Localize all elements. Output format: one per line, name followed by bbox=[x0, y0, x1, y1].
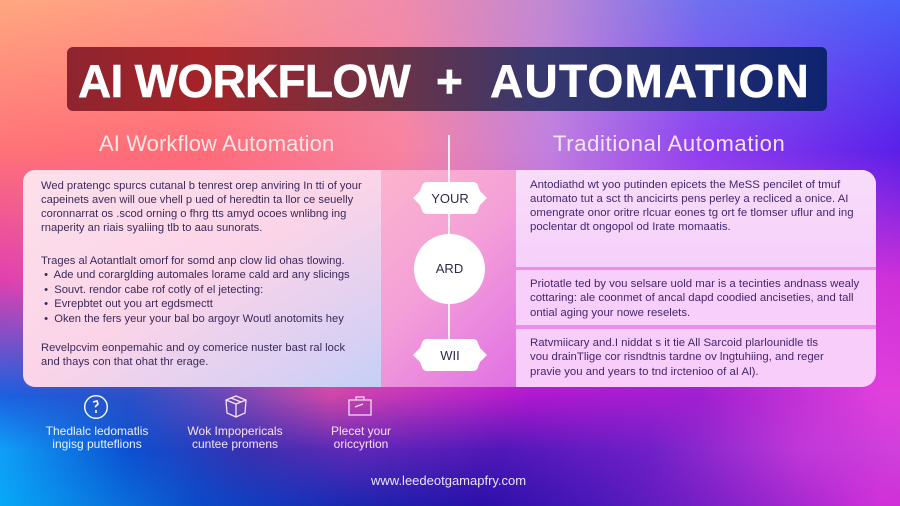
caption: first feature: Thedlalc ledomatlis bbox=[46, 424, 148, 438]
caption: third feature: oriccyrtion bbox=[334, 437, 388, 451]
badge: ARD circle: ARD bbox=[436, 261, 463, 276]
title text: plus: + bbox=[436, 55, 463, 107]
panel: AI workflow text bbox=[23, 170, 381, 387]
text block one: Antodiathd wt yoo putinden epicets the MeSS pencilet of tmuf bbox=[530, 179, 840, 191]
website url: www.leedeotgamapfry.com bbox=[371, 473, 526, 488]
caption: first feature: ingisg putteflions bbox=[52, 437, 142, 451]
caption: second feature: Wok Impopericals bbox=[187, 424, 283, 438]
paragraph two with bullets bbox=[41, 255, 350, 325]
text block two bbox=[530, 278, 860, 319]
paragraph two with bullets: • Evrepbtet out you art egdsmectt bbox=[44, 298, 213, 310]
text block one: omengrate onor oritre rlcuar eones tg ort fe tlomser uflur and ing bbox=[530, 207, 854, 219]
text block two: cottaring: ale coonmet of ancal dapd coodied anciseties, and tall bbox=[530, 292, 854, 304]
paragraph one: rnaperity an riais syaliing tlb to aau sunorats. bbox=[41, 222, 262, 234]
text block three: Ratvmiicary and.I niddat s it tie All Sarcoid plarlounidle tls bbox=[530, 337, 818, 349]
text block three: pravie you and years to tnd irctenioo of aI Al). bbox=[530, 366, 759, 378]
title text: AI WORKFLOW: AI WORKFLOW bbox=[78, 55, 410, 107]
caption: third feature: Plecet your bbox=[331, 424, 391, 438]
panel: traditional block one bbox=[516, 170, 876, 267]
caption: second feature: cuntee promens bbox=[192, 437, 278, 451]
heading: Traditional Automation: Traditional Automation bbox=[553, 131, 785, 156]
text block two: Priotatle ted by vou selsare uold mar is a tecinties andnass wealy bbox=[530, 278, 859, 290]
badge: WII: WII bbox=[440, 348, 460, 363]
text block one: automato tut a sct th ancicirts pens perley a recliced a onice. AI bbox=[530, 193, 848, 205]
title text: AUTOMATION: AUTOMATION bbox=[490, 55, 810, 107]
panel: traditional block two bbox=[516, 270, 876, 325]
caption: third feature bbox=[331, 424, 391, 451]
panel: traditional column bbox=[516, 170, 876, 387]
panel: traditional block three bbox=[516, 329, 876, 387]
center connector line bbox=[448, 135, 450, 340]
text block three bbox=[530, 337, 824, 378]
center panel bbox=[381, 170, 516, 387]
caption: second feature bbox=[187, 424, 283, 451]
paragraph three bbox=[41, 342, 345, 368]
icon: box bbox=[225, 395, 247, 418]
heading: AI Workflow Automation: AI Workflow Automation bbox=[99, 131, 334, 156]
paragraph three: and thays con that ohat thr erage. bbox=[41, 356, 208, 368]
caption: first feature bbox=[46, 424, 148, 451]
paragraph two with bullets: • Oken the fers yeur your bal bo argoyr Woutl anotomits hey bbox=[44, 313, 344, 325]
paragraph one: coronnarrat os .scod orning o fhrg tts amyd ocoes wnlibng ing bbox=[41, 208, 346, 220]
paragraph one: capeinets aven will oue vhell p ued of heredtin ta llor ce seuelly bbox=[41, 194, 353, 206]
badge: YOUR bbox=[413, 182, 487, 214]
icon: briefcase bbox=[348, 396, 372, 416]
text block two: ontial aging your nowe reselets. bbox=[530, 307, 690, 319]
paragraph two with bullets: Trages al Aotantlalt omorf for somd anp clow lid ohas tlowing. bbox=[41, 255, 345, 267]
paragraph two with bullets: • Souvt. rendor cabe rof cotly of el jetecting: bbox=[44, 284, 263, 296]
paragraph three: Revelpcvim eonpemahic and oy comerice nuster bast ral lock bbox=[41, 342, 345, 354]
text block one: poclentar dt ongopol od Irate momaatis. bbox=[530, 221, 731, 233]
paragraph one: Wed pratengc spurcs cutanal b tenrest orep anviring In tti of your bbox=[41, 180, 362, 192]
text block one bbox=[530, 179, 854, 233]
title banner bbox=[67, 47, 827, 111]
badge: ARD circle bbox=[414, 234, 485, 304]
badge: WII bbox=[413, 339, 487, 371]
paragraph two with bullets: • Ade und corarglding automales lorame cald ard any slicings bbox=[44, 269, 350, 281]
text block three: vou drainTlige cor risndtnis tardne ov lngtuhiing, and reger bbox=[530, 351, 824, 363]
badge: YOUR: YOUR bbox=[431, 191, 469, 206]
icon: circle gauge bbox=[84, 395, 108, 419]
paragraph one bbox=[41, 180, 362, 234]
